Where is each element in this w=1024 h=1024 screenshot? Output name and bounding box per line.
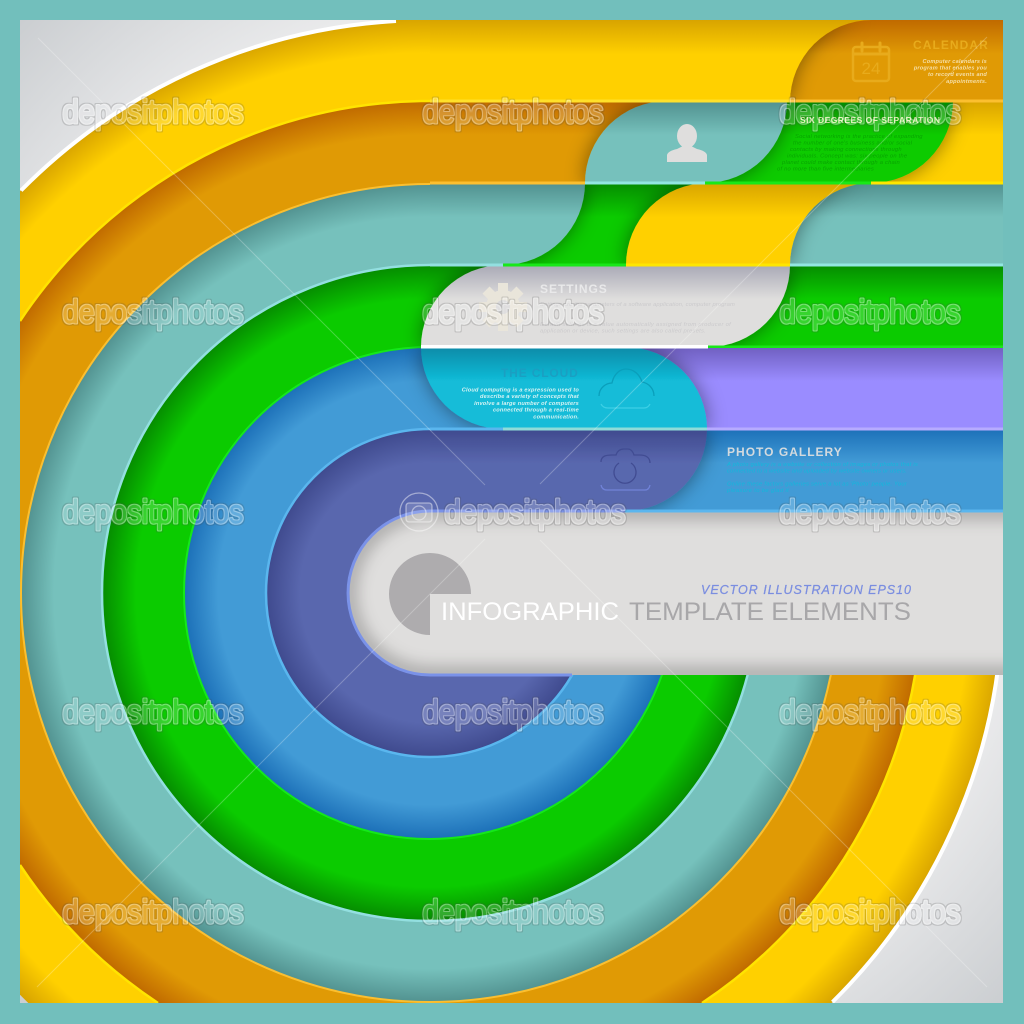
watermark text: depositphotos xyxy=(422,893,604,930)
text: photo gallery description: pleasure to be glad it xyxy=(726,488,789,494)
band row 4: green with grey settings tab xyxy=(421,265,1003,347)
text: cloud description: describe a variety of concepts that xyxy=(480,394,580,400)
text: six degrees description: individuals. Concept was: six people on the xyxy=(787,154,908,160)
watermark text: depositphotos xyxy=(62,693,244,730)
band row 6: indigo camera tab and blue xyxy=(430,429,1003,511)
icon: camera xyxy=(601,449,650,490)
text: calendar description: program that enables you xyxy=(913,66,987,72)
text: six degrees description xyxy=(777,134,923,172)
watermark text: depositphotos xyxy=(444,493,626,530)
watermark text: depositphotos xyxy=(780,493,960,530)
ring: orange xyxy=(20,101,922,1003)
watermark text: depositphotos xyxy=(780,93,960,130)
watermark text: depositphotos xyxy=(62,293,244,330)
watermark text: depositphotos xyxy=(780,693,960,730)
watermark text: depositphotos xyxy=(62,493,244,530)
text: six degrees description: Social networking is the practice of expanding xyxy=(795,134,923,140)
text: photo gallery description: A photo gallery is a website or collection of images or photos that is xyxy=(726,462,918,468)
heading: calendar: CALENDAR xyxy=(913,38,989,52)
band row 3: teal, green, yellow tab, teal xyxy=(430,183,1003,265)
band row 2: orange, teal tab, green tab, yellow xyxy=(430,101,1003,183)
ring: indigo xyxy=(266,429,594,757)
watermark text: depositphotos xyxy=(780,893,960,930)
text: six degrees description: contacts by making connections through xyxy=(790,147,902,153)
ring: blue xyxy=(184,347,676,839)
title text xyxy=(441,583,911,626)
ring: green xyxy=(102,265,758,921)
calendar block xyxy=(853,38,989,85)
ring: teal xyxy=(21,184,839,1002)
text: photo gallery description: connected to a website and uploaded by website owners or users. xyxy=(727,468,907,474)
title logo: pie xyxy=(389,553,471,635)
text: cloud description: involve a large number of computers xyxy=(474,401,579,407)
text: settings description: Settings are the parameters of a software application, computer program xyxy=(540,302,735,308)
heading: the cloud: THE CLOUD xyxy=(501,366,579,380)
watermark text: depositphotos xyxy=(422,293,604,330)
heading: settings: SETTINGS xyxy=(540,282,608,296)
watermark text: depositphotos xyxy=(780,293,960,330)
watermark text xyxy=(62,93,960,930)
text: calendar description: to record events and xyxy=(928,72,987,78)
heading: six degrees of separation: SIX DEGREES OF SEPARATION xyxy=(800,115,940,125)
icon: person xyxy=(667,124,707,162)
lip highlights on the band edges xyxy=(421,100,1003,430)
text: settings description: Default settings is a value automatically assigned from producer of xyxy=(540,322,732,328)
title text: TEMPLATE ELEMENTS xyxy=(629,598,911,626)
band row 1: yellow and orange calendar tab xyxy=(430,20,1003,102)
text: settings description xyxy=(540,302,735,334)
cloud block xyxy=(462,366,654,420)
grey title panel xyxy=(348,510,1024,675)
heading: photo gallery: PHOTO GALLERY xyxy=(727,445,843,459)
text: settings description: application or device, such settings are also called presets. xyxy=(540,328,706,334)
text: cloud description: connected through a real-time xyxy=(493,408,579,414)
text: photo gallery description xyxy=(726,462,918,494)
text: six degrees description: planet could make contact through a chain xyxy=(781,160,900,166)
watermark logo xyxy=(400,493,438,531)
text: cloud description xyxy=(462,388,580,420)
watermark text: depositphotos xyxy=(62,893,244,930)
icon: calendar: 24 xyxy=(862,59,880,78)
watermark text: depositphotos xyxy=(62,93,244,130)
icon: cloud xyxy=(599,369,654,408)
text: six degrees description: of no more than five intermediaries xyxy=(777,166,874,172)
text: photo gallery description: Online these factors galleries serve a lot as 'Photo' people. Your xyxy=(727,482,908,488)
watermark text: depositphotos xyxy=(422,93,604,130)
text: calendar description: appointments. xyxy=(946,79,987,85)
text: cloud description: Cloud computing is a expression used to xyxy=(462,388,579,394)
icon: gear xyxy=(479,283,527,331)
photo gallery block xyxy=(726,445,918,494)
six degrees block xyxy=(777,115,940,172)
text: six degrees description: the number of one's business and/or social xyxy=(793,140,913,146)
text: cloud description: communication. xyxy=(533,414,579,420)
band row 5: blue, cyan cloud tab, purple xyxy=(421,347,1003,429)
title text: INFOGRAPHIC xyxy=(441,598,619,626)
title text: VECTOR ILLUSTRATION EPS10 xyxy=(701,583,911,597)
text: calendar description: Computer calendars is xyxy=(922,59,987,65)
text: calendar description xyxy=(913,59,987,85)
watermark text: depositphotos xyxy=(422,693,604,730)
settings block xyxy=(479,282,735,334)
